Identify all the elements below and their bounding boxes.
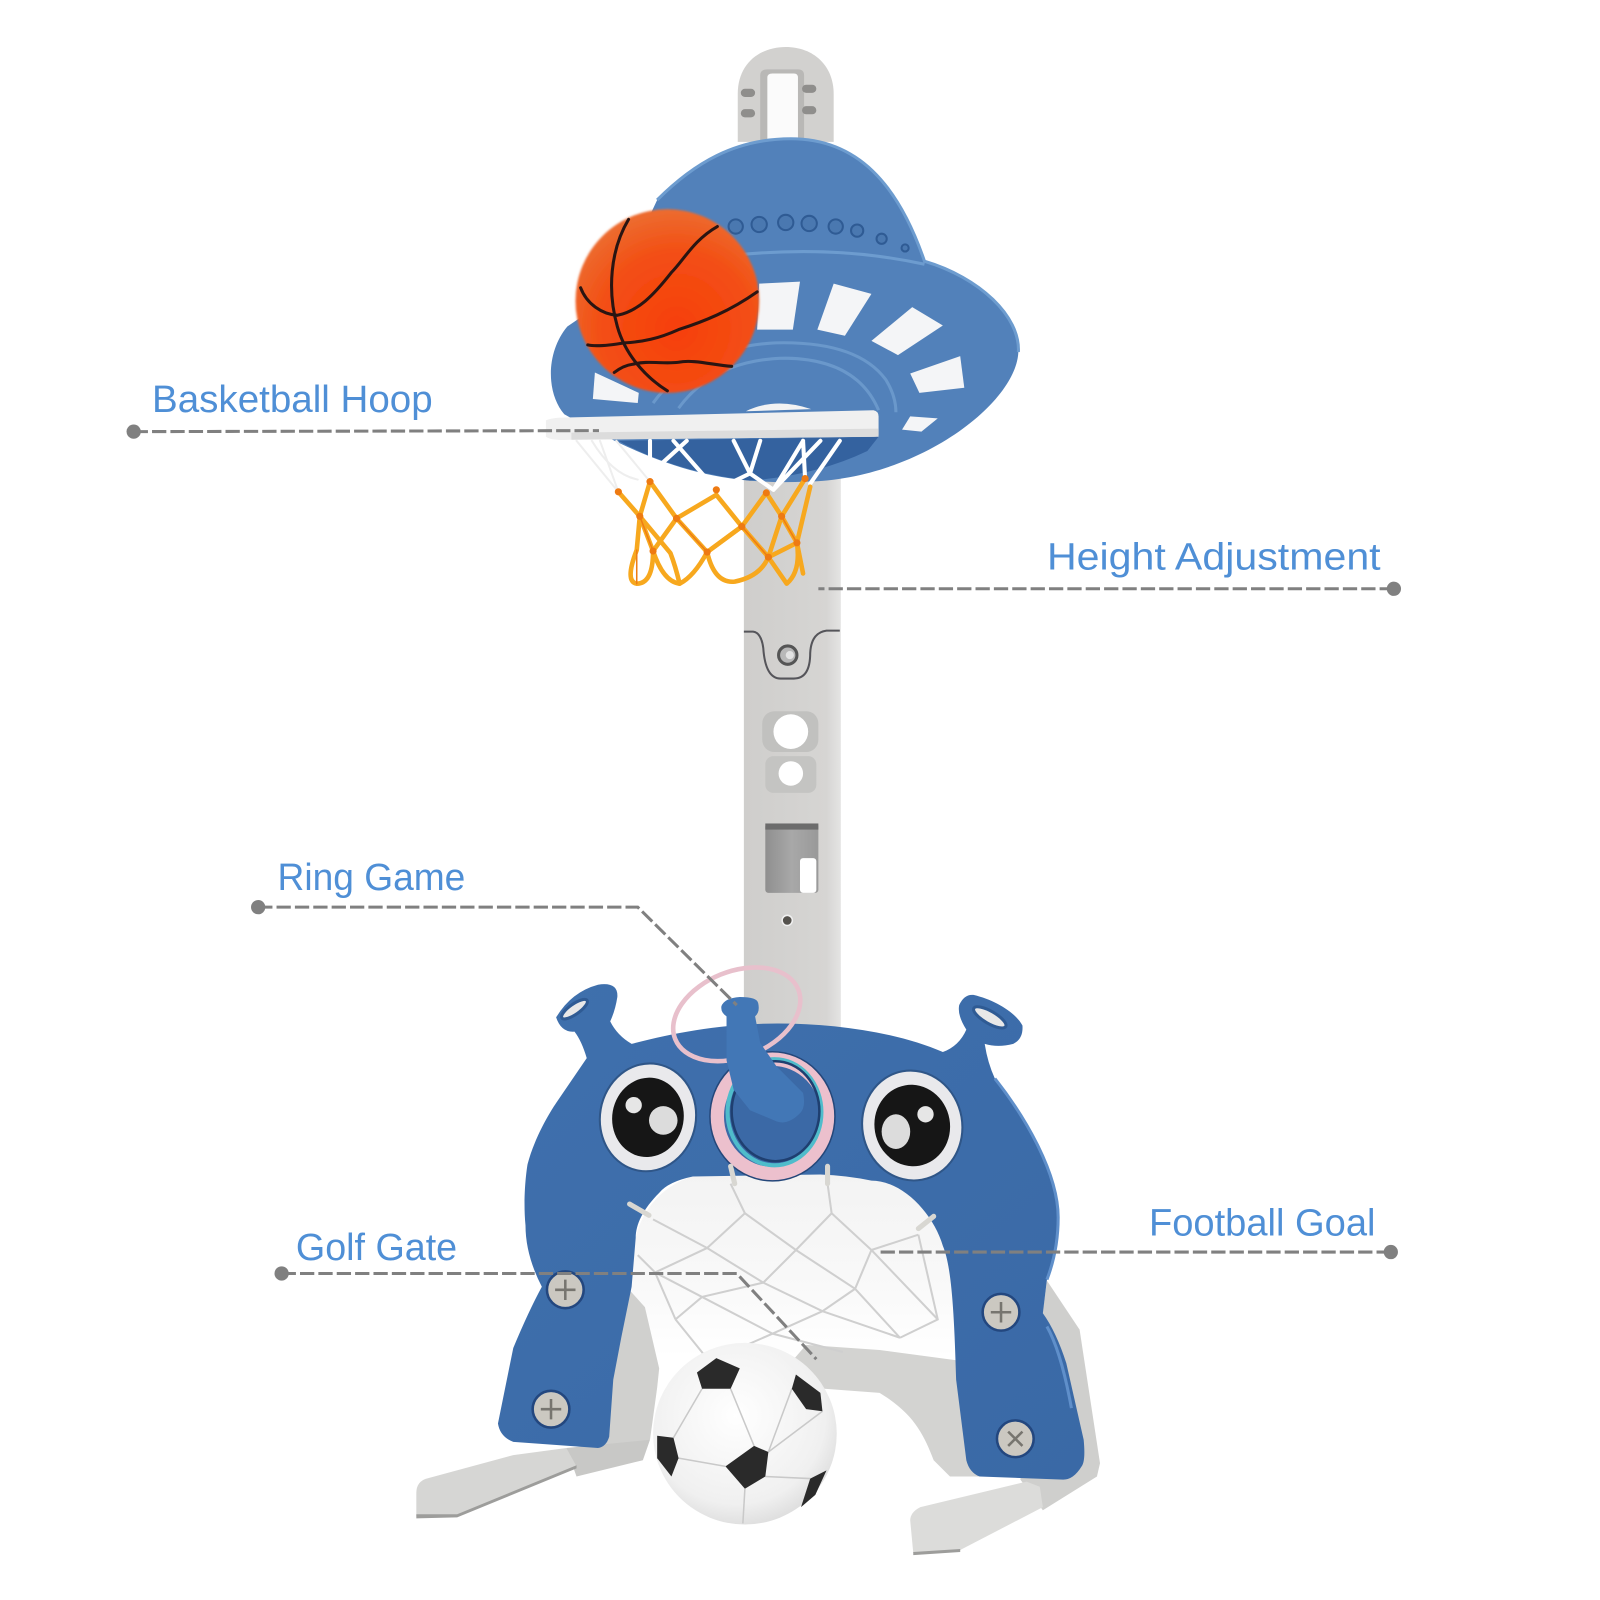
hoop rim	[546, 404, 879, 440]
screws	[533, 1271, 1034, 1457]
basketball	[576, 209, 759, 393]
backboard dots	[729, 215, 909, 252]
right eye	[853, 1063, 971, 1188]
flying ring	[659, 950, 814, 1079]
goal back frame and feet	[416, 1281, 1100, 1555]
goal body	[498, 950, 1084, 1480]
net hooks	[630, 1166, 934, 1229]
callout: Height Adjustment	[818, 535, 1401, 596]
goal net	[638, 1184, 938, 1367]
product: 4-in-1 sports stand	[416, 47, 1100, 1555]
callout: Ring Game	[251, 856, 737, 1005]
callout: Golf Gate: Golf Gate	[296, 1226, 457, 1268]
goal opening	[624, 1173, 955, 1357]
upright pole	[738, 47, 841, 1061]
callout: Football Goal: Football Goal	[1149, 1202, 1376, 1244]
stacked rings	[709, 1051, 836, 1182]
ring peg	[721, 997, 804, 1122]
soccer ball	[653, 1343, 837, 1524]
callout: Golf Gate	[274, 1226, 816, 1359]
backboard windows	[593, 282, 964, 432]
callout: Football Goal	[880, 1202, 1398, 1259]
callout: Basketball Hoop: Basketball Hoop	[152, 378, 433, 420]
hoop net	[577, 441, 840, 584]
net knots	[615, 475, 809, 561]
antenna slits	[559, 996, 1009, 1032]
callout: Ring Game: Ring Game	[278, 856, 465, 898]
backboard	[551, 139, 1018, 482]
callout: Height Adjustment: Height Adjustment	[1047, 535, 1381, 577]
callout: Basketball Hoop	[127, 378, 599, 439]
left eye	[591, 1056, 705, 1179]
